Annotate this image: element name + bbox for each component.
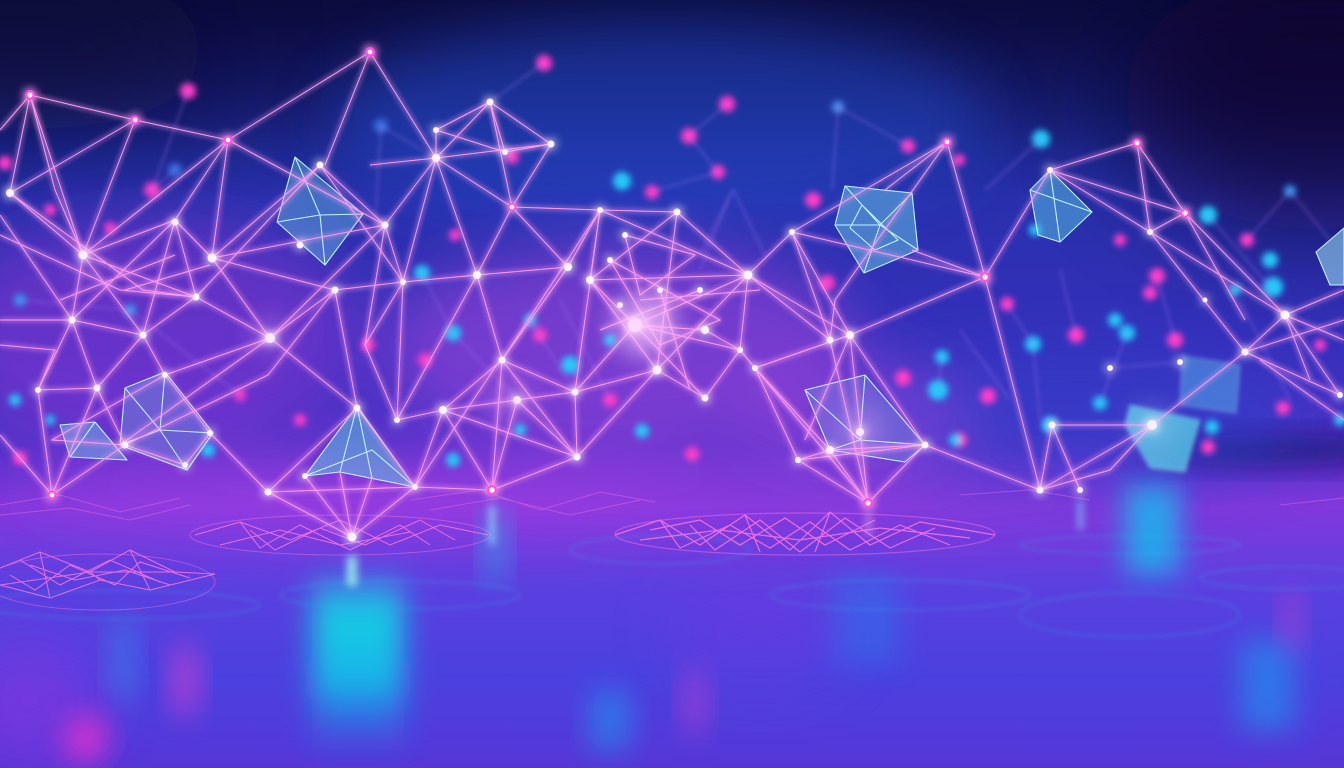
floor ripples <box>0 536 1344 637</box>
polyhedron: lower right square <box>1180 356 1240 413</box>
edges: centre cluster <box>575 142 985 457</box>
polyhedron: lower centre right <box>805 375 925 462</box>
edges: right cluster <box>1137 143 1344 420</box>
polyhedron: far right edge <box>1316 228 1344 285</box>
bright network edges <box>0 52 1344 537</box>
polyhedron: lower right cyan <box>1125 405 1200 472</box>
edges: centre-right cluster <box>755 142 1245 503</box>
ambient purple haze behind network <box>0 220 1180 520</box>
background blurred nodes: magenta and cyan <box>0 55 1344 467</box>
bright network nodes <box>6 47 1343 542</box>
floor reflections <box>0 485 1344 768</box>
node reflections on floor <box>347 500 1083 586</box>
nodes: magenta tips <box>25 47 1190 508</box>
edges: centre-left cluster <box>268 102 600 537</box>
polyhedron: top right <box>1030 170 1092 242</box>
floor mandala patterns <box>0 490 1344 610</box>
mandala: centre-left <box>190 515 490 555</box>
mandala: far back <box>0 490 1344 520</box>
mandala: centre <box>615 512 995 555</box>
polyhedron: centre right <box>835 186 918 273</box>
mandala: left <box>0 550 215 610</box>
edges: left cluster <box>0 52 436 495</box>
translucent polyhedra <box>60 157 1344 487</box>
polyhedron: lower left small <box>60 422 127 460</box>
polyhedron: lower left large <box>120 372 213 470</box>
polyhedron: centre bottom <box>305 406 415 487</box>
nodes: white core <box>6 50 1343 541</box>
central white glow <box>80 255 1166 448</box>
polyhedron: upper left <box>277 157 363 265</box>
background dim network lines <box>20 63 1330 420</box>
